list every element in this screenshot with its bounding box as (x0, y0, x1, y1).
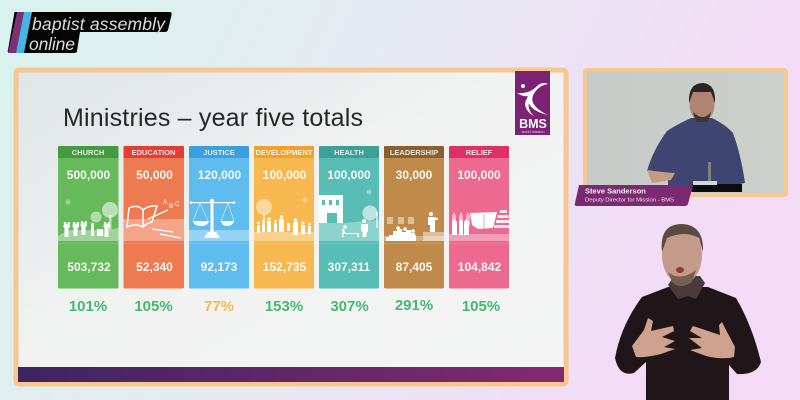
percentage row: 153% (265, 298, 303, 315)
percentage row: 77% (204, 298, 234, 315)
column: development (254, 146, 314, 288)
icon: aid supplies (452, 210, 509, 235)
column: development: 152,735 (263, 260, 307, 274)
column: leadership (384, 146, 444, 288)
icon: open book (127, 199, 181, 238)
speaker caption: Steve Sanderson (585, 186, 646, 196)
column: justice: JUSTICE (203, 148, 235, 157)
logo: baptist assembly online (8, 12, 172, 54)
percentage row: 101% (69, 298, 107, 315)
column: development: DEVELOPMENT (256, 148, 313, 157)
logo: baptist assembly online: baptist assembly (32, 14, 166, 34)
column: education: 50,000 (136, 168, 173, 182)
percentage row: 307% (330, 298, 369, 315)
icon: clinic and patient (319, 190, 378, 237)
column: church (58, 146, 118, 288)
icon: community group (256, 198, 311, 235)
column: church: 500,000 (67, 168, 111, 182)
icon: church people (64, 200, 118, 237)
column: health: 307,311 (328, 260, 371, 274)
icon: open book: B (169, 203, 173, 210)
column: relief: RELIEF (466, 148, 493, 157)
column: justice: 120,000 (198, 168, 242, 182)
percentage row: 291% (395, 297, 433, 314)
logo: baptist assembly online: online (29, 34, 75, 54)
column: church: 503,732 (67, 260, 111, 274)
icon: BMS logo (515, 71, 550, 135)
column: leadership: 87,405 (396, 260, 433, 274)
speaker caption (575, 185, 693, 206)
percentage row (69, 297, 500, 315)
icon: scales of justice (190, 199, 235, 238)
column: leadership: LEADERSHIP (390, 148, 438, 157)
icon: BMS logo: BMS (519, 117, 547, 131)
column: health (319, 146, 379, 288)
icon: speaker and audience (386, 212, 444, 241)
column: health: 100,000 (327, 168, 371, 182)
column: justice: 92,173 (201, 260, 238, 274)
column: development: 100,000 (263, 168, 307, 182)
icon: open book: C (175, 201, 180, 208)
slide title: Ministries – year five totals (63, 104, 363, 132)
percentage row: 105% (462, 298, 500, 315)
column: relief: 104,842 (458, 260, 502, 274)
column: relief (449, 146, 509, 288)
column: leadership: 30,000 (396, 168, 433, 182)
column: health: HEALTH (334, 148, 364, 157)
column: relief: 100,000 (457, 168, 501, 182)
speaker (647, 83, 745, 192)
icon: open book: A (163, 199, 168, 206)
column: education (124, 146, 184, 288)
slide footer bar (18, 367, 564, 382)
column: education: 52,340 (136, 260, 173, 274)
column: justice (189, 146, 249, 288)
sign language interpreter (615, 224, 761, 400)
panel: slide (16, 70, 566, 384)
panel: speaker video (575, 70, 786, 206)
icon: BMS logo: world mission (522, 130, 544, 134)
percentage row: 105% (134, 298, 173, 315)
column: church: CHURCH (72, 148, 104, 157)
speaker caption: Deputy Director for Mission - BMS (585, 198, 674, 204)
column: education: EDUCATION (131, 148, 176, 157)
